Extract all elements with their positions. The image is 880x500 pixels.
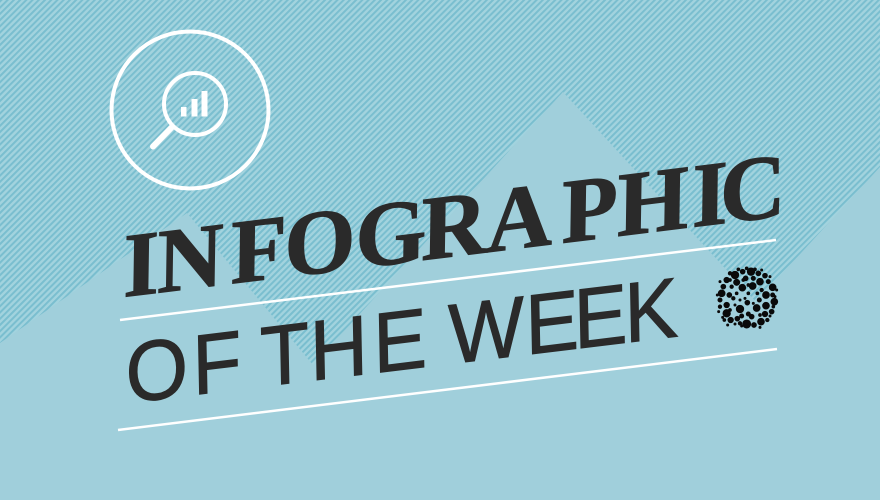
bar chart glyph [181,91,208,116]
icon: black dotted circle [716,267,778,328]
heading: OF THE WEEK: OF THE WEEK [125,259,679,421]
magnifier handle [153,127,172,146]
heading: INFOGRAPHIC: INFOGRAPHIC [123,134,787,317]
divider line lower [118,349,777,430]
icon: magnifying glass badge [112,32,268,188]
magnifier lens [164,73,226,135]
divider line upper [120,240,776,320]
badge ring [112,32,268,188]
